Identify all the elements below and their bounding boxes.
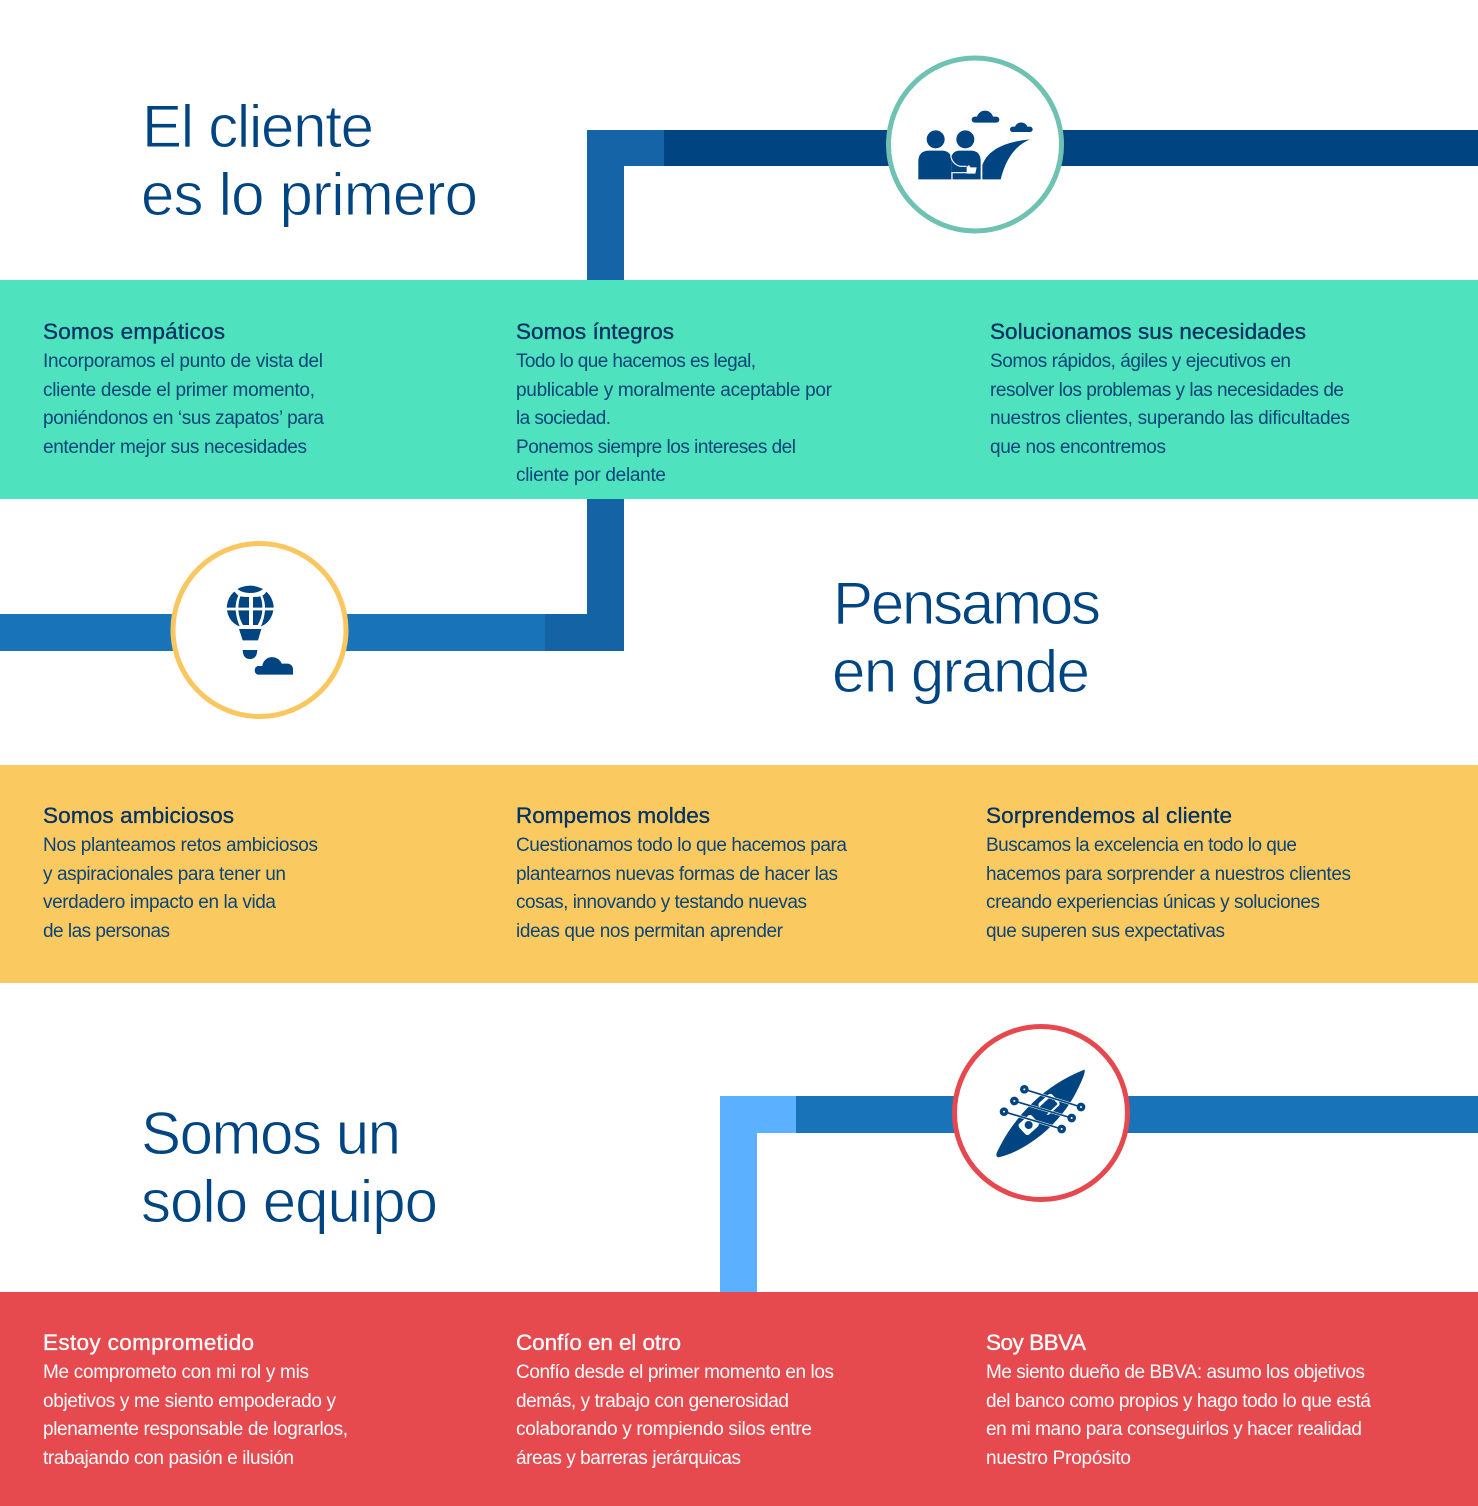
column: Confío en el otro: Confío desde el primer momento en los [516,1362,834,1383]
column: Somos ambiciosos: Somos ambiciosos [43,803,234,828]
column: Soy BBVA: Me siento dueño de BBVA: asumo los objetivos [986,1362,1365,1383]
column: Solucionamos sus necesidades: Solucionamos sus necesidades [990,319,1306,344]
column: Somos íntegros: la sociedad. [516,408,611,429]
column: Solucionamos sus necesidades: Somos rápidos, ágiles y ejecutivos en [990,351,1291,372]
column: Sorprendemos al cliente: creando experiencias únicas y soluciones [986,892,1320,913]
column: Somos íntegros [516,319,833,486]
column: Rompemos moldes [516,803,847,942]
title: Pensamos en grande: Pensamos [833,570,1101,637]
column: Somos ambiciosos: Nos planteamos retos ambiciosos [43,835,318,856]
connector: top path [587,130,1478,281]
column: Somos ambiciosos: verdadero impacto en la vida [43,892,276,913]
title: Somos un solo equipo: solo equipo [141,1168,438,1235]
icon: kayak with rowers [954,1026,1128,1200]
column: Somos empáticos: cliente desde el primer momento, [43,380,315,401]
column: Estoy comprometido: trabajando con pasión e ilusión [43,1448,294,1469]
column: Estoy comprometido: plenamente responsable de lograrlos, [43,1419,348,1440]
column: Confío en el otro: demás, y trabajo con generosidad [516,1391,789,1412]
title: El cliente es lo primero: El cliente [142,93,374,160]
connector: bottom path [720,1096,1478,1292]
column: Somos ambiciosos: de las personas [43,921,170,942]
panel: Pensamos en grande [0,765,1478,983]
column: Somos íntegros: cliente por delante [516,465,666,486]
column: Soy BBVA: Soy BBVA [986,1330,1086,1355]
column: Confío en el otro [516,1330,834,1469]
column: Somos íntegros: publicable y moralmente aceptable por [516,380,833,401]
title: Somos un solo equipo: Somos un [141,1100,401,1167]
column: Soy BBVA: en mi mano para conseguirlos y hacer realidad [986,1419,1362,1440]
column: Confío en el otro: colaborando y rompiendo silos entre [516,1419,812,1440]
title: El cliente es lo primero: es lo primero [141,161,478,228]
column: Somos empáticos: Incorporamos el punto de vista del [43,351,323,372]
title: Pensamos en grande: en grande [832,638,1090,705]
column: Somos empáticos [43,319,324,458]
title: Pensamos en grande [832,570,1101,705]
column: Rompemos moldes: Cuestionamos todo lo que hacemos para [516,835,847,856]
column: Somos empáticos: poniéndonos en ‘sus zapatos’ para [43,408,324,429]
column: Sorprendemos al cliente: Sorprendemos al cliente [986,803,1232,828]
column: Somos íntegros: Somos íntegros [516,319,674,344]
column: Somos ambiciosos: y aspiracionales para tener un [43,864,286,885]
title: Somos un solo equipo [141,1100,438,1235]
column: Soy BBVA [986,1330,1371,1469]
icon: people and road [888,58,1062,231]
column: Somos empáticos: Somos empáticos [43,319,225,344]
column: Sorprendemos al cliente: hacemos para sorprender a nuestros clientes [986,864,1351,885]
column: Solucionamos sus necesidades [990,319,1350,458]
column: Rompemos moldes: ideas que nos permitan aprender [516,921,784,942]
title: El cliente es lo primero [141,93,478,228]
column: Rompemos moldes: plantearnos nuevas formas de hacer las [516,864,838,885]
panel: Somos un solo equipo [0,1292,1478,1506]
column: Rompemos moldes: Rompemos moldes [516,803,710,828]
icon: hot air balloon and cloud [173,544,346,716]
column: Sorprendemos al cliente: que superen sus expectativas [986,921,1225,942]
panel: El cliente es lo primero [0,280,1478,499]
column: Soy BBVA: nuestro Propósito [986,1448,1131,1469]
column: Sorprendemos al cliente [986,803,1351,942]
column: Soy BBVA: del banco como propios y hago todo lo que está [986,1391,1371,1412]
column: Estoy comprometido [43,1330,348,1469]
column: Somos íntegros: Ponemos siempre los intereses del [516,437,796,458]
column: Solucionamos sus necesidades: que nos encontremos [990,437,1166,458]
column: Somos íntegros: Todo lo que hacemos es legal, [516,351,756,372]
column: Estoy comprometido: Me comprometo con mi rol y mis [43,1362,309,1383]
column: Confío en el otro: Confío en el otro [516,1330,681,1355]
column: Confío en el otro: áreas y barreras jerárquicas [516,1448,741,1469]
column: Solucionamos sus necesidades: resolver los problemas y las necesidades de [990,380,1344,401]
column: Somos ambiciosos [43,803,318,942]
column: Estoy comprometido: objetivos y me siento empoderado y [43,1391,336,1412]
column: Somos empáticos: entender mejor sus necesidades [43,437,307,458]
column: Rompemos moldes: cosas, innovando y testando nuevas [516,892,807,913]
column: Solucionamos sus necesidades: nuestros clientes, superando las dificultades [990,408,1350,429]
connector: middle path [0,499,624,651]
column: Estoy comprometido: Estoy comprometido [43,1330,254,1355]
column: Sorprendemos al cliente: Buscamos la excelencia en todo lo que [986,835,1297,856]
